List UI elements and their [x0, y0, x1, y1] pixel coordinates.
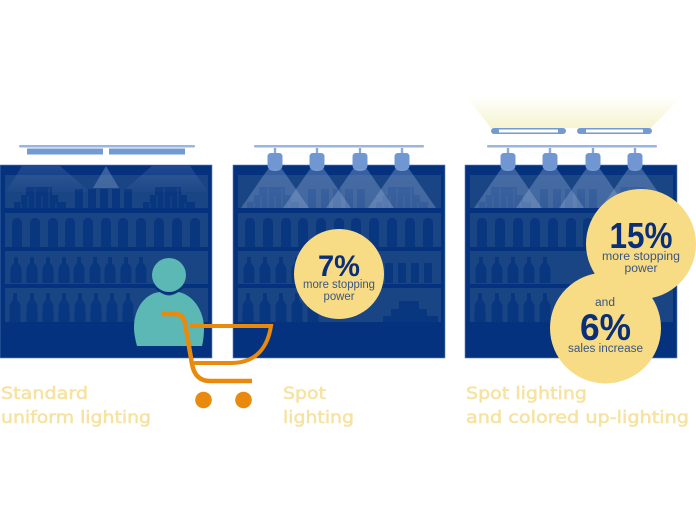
- caption: spot lighting: [283, 384, 354, 428]
- callout: and 6% sales increase: [550, 272, 661, 384]
- caption: spot lighting: lighting: [283, 408, 354, 428]
- callout: 7% more stopping power: [294, 229, 384, 319]
- panel: spot lighting: [233, 165, 445, 358]
- callout: 15% more stopping power: 15%: [610, 215, 672, 256]
- callout: 7% more stopping power: 7%: [318, 250, 360, 283]
- callout: and 6% sales increase: 6%: [580, 307, 631, 348]
- callout: 15% more stopping power: power: [624, 263, 658, 275]
- uniform light cones: [6, 166, 208, 192]
- caption: standard uniform lighting: [1, 384, 151, 428]
- caption: standard uniform lighting: Standard: [1, 384, 88, 404]
- caption: spot lighting and colored up-lighting: Spot lighting: [466, 384, 587, 404]
- callout: 7% more stopping power: more stopping: [303, 279, 375, 291]
- light fixture: uniform: [19, 145, 195, 154]
- icon: shopper: [134, 256, 204, 346]
- callout: and 6% sales increase: sales increase: [568, 343, 643, 355]
- callout: and 6% sales increase: and: [595, 297, 615, 309]
- spot light fixtures: [241, 145, 436, 208]
- spot light fixtures with up-lighting: [474, 145, 669, 208]
- callout: 7% more stopping power: power: [324, 291, 355, 303]
- callout: 15% more stopping power: [586, 189, 696, 299]
- caption: spot lighting: Spot: [283, 384, 326, 404]
- up-lighting glow: [466, 96, 682, 128]
- caption: spot lighting and colored up-lighting: [466, 384, 689, 428]
- callout: 15% more stopping power: more stopping: [602, 251, 680, 263]
- panel: spot lighting and colored up-lighting: [465, 165, 677, 358]
- panel: standard uniform lighting: [0, 145, 212, 358]
- caption: standard uniform lighting: uniform lighting: [1, 408, 151, 428]
- caption: spot lighting and colored up-lighting: and colored up-lighting: [466, 408, 689, 428]
- icon: shopping cart: [162, 314, 271, 408]
- up-lighting tubes: [491, 128, 652, 134]
